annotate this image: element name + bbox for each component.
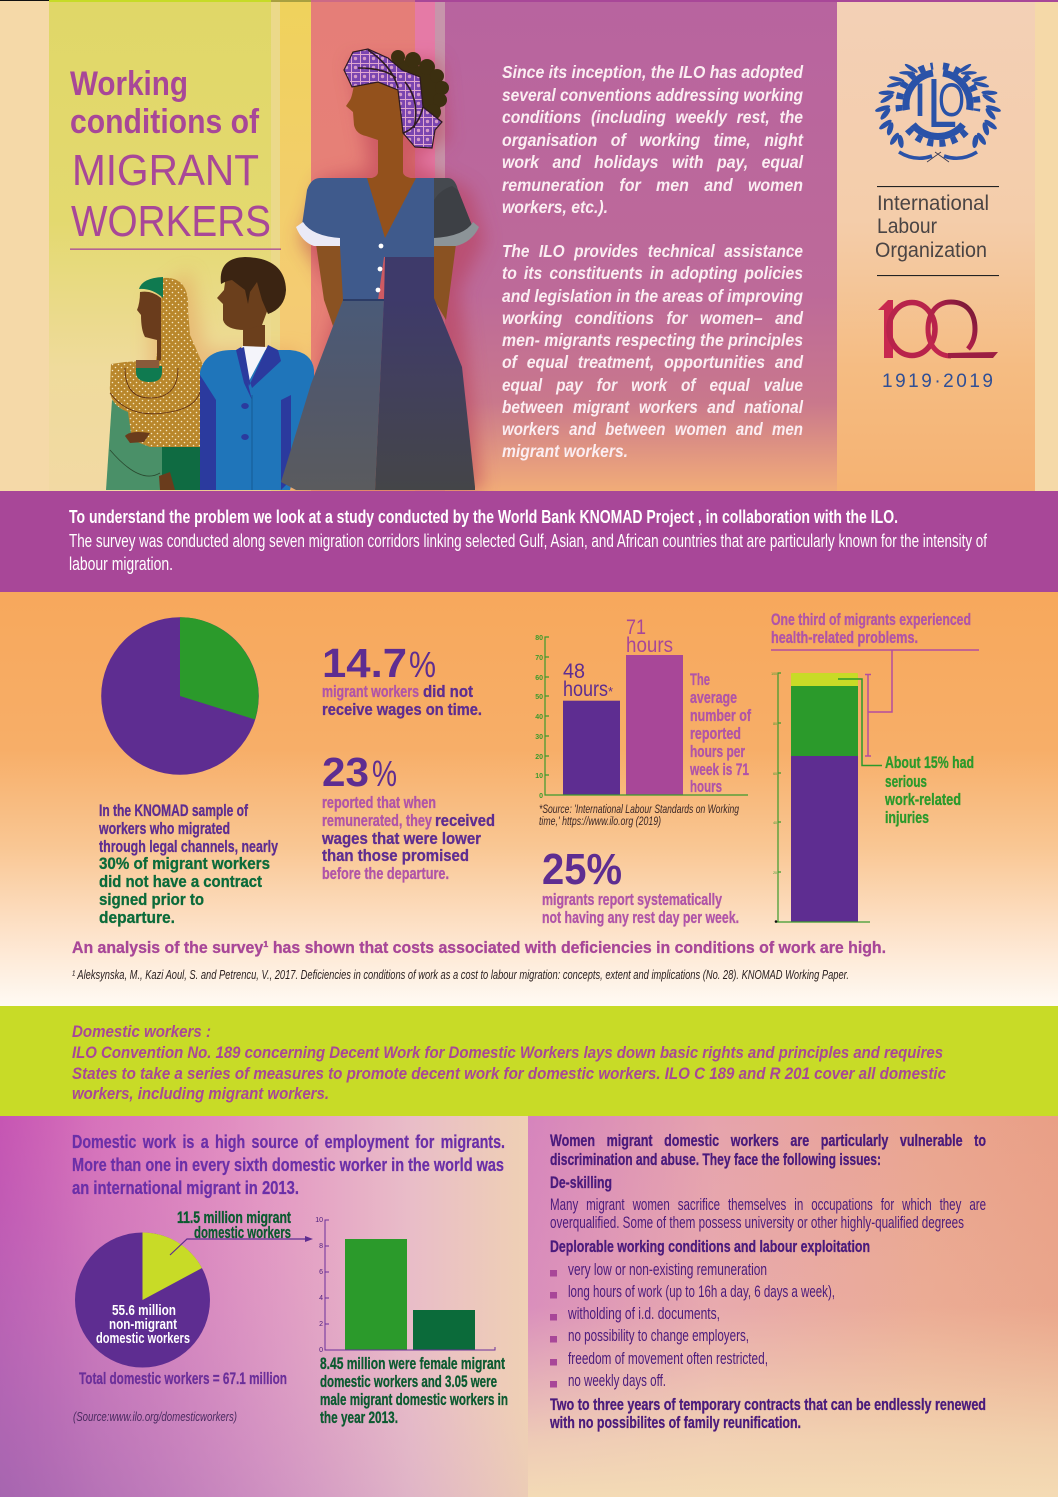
text: female and male migrant domestic workers: male migrant domestic workers in: [320, 1390, 508, 1409]
callout: 11.5 million migrant domestic workers: domestic workers: [194, 1223, 291, 1242]
text: average hours: [689, 670, 751, 796]
intro text: ILO conventions: organisation of working time, night: [502, 130, 804, 150]
stat: 23 percent: than those promised: [322, 846, 469, 865]
stat: 14.7 percent: did not: [423, 682, 473, 701]
callout: one third health problems: One third of migrants experienced: [771, 610, 971, 629]
intro text: ILO conventions: [502, 62, 804, 461]
logo: organization name: International: [877, 192, 989, 215]
logo: organization name: Organization: [875, 239, 987, 262]
panel: domestic workers convention band: workers, including migrant workers.: [72, 1085, 329, 1103]
bar chart: female and male migrant domestic workers: 0: [319, 1347, 323, 1354]
bar chart: weekly hours: 48: [563, 660, 585, 683]
logo: organization name: Labour: [877, 215, 937, 238]
intro text: ILO conventions: The ILO provides technical assistance: [502, 241, 803, 261]
callout: one third health problems: [771, 610, 979, 756]
panel: domestic workers convention band: Domestic workers :: [72, 1023, 211, 1041]
bar chart: weekly hours: hours: [563, 678, 608, 701]
list: labour exploitation issues: [550, 1260, 835, 1390]
bar chart: weekly hours: 70: [535, 655, 543, 662]
pie chart: domestic workers: domestic workers: [96, 1331, 190, 1347]
stat: 23 percent: [321, 749, 495, 883]
list: labour exploitation issues: witholding of i.d. documents,: [567, 1304, 720, 1323]
callout: 11.5 million migrant domestic workers: 11.5 million migrant: [177, 1208, 291, 1227]
shadow: [150, 60, 485, 490]
bar chart: weekly hours: 40: [535, 714, 543, 721]
intro text: ILO conventions: work and holidays with pay, equal: [502, 152, 804, 172]
list: labour exploitation issues: very low or non-existing remuneration: [568, 1260, 767, 1279]
text: KNOMAD sample contracts: 30% of migrant workers: [99, 854, 270, 873]
bar chart: female and male migrant domestic workers: 6: [319, 1269, 323, 1276]
text: female and male migrant domestic workers: 8.45 million were female migrant: [320, 1354, 505, 1373]
text: female and male migrant domestic workers: domestic workers and 3.05 were: [320, 1372, 497, 1391]
bar chart: female and male migrant domestic workers: [315, 1217, 495, 1354]
text: KNOMAD sample contracts: In the KNOMAD sample of: [99, 801, 248, 820]
intro text: ILO conventions: to its constituents in adopting policies: [502, 263, 803, 283]
text: KNOMAD sample contracts: signed prior to: [99, 890, 204, 909]
text: total domestic workers: Total domestic workers = 67.1 million: [79, 1369, 287, 1388]
intro text: ILO conventions: of equal treatment, opportunities and: [502, 352, 803, 372]
callout: serious injuries: [838, 679, 974, 827]
text: women migrant domestic workers issues: [550, 1131, 986, 1256]
list: labour exploitation issues: no possibility to change employers,: [568, 1326, 749, 1345]
panel: study introduction band: labour migration.: [69, 554, 173, 574]
logo: ILO centenary 100: 1919·2019: [882, 371, 993, 392]
pie chart: domestic workers: 55.6 million: [112, 1303, 176, 1319]
callout: serious injuries: injuries: [885, 808, 929, 827]
bar chart: female and male migrant domestic workers: 2: [319, 1321, 323, 1328]
text: female and male migrant domestic workers: the year 2013.: [320, 1408, 398, 1427]
gear: [906, 73, 970, 137]
stat: 23 percent: %: [372, 753, 397, 794]
text: female and male migrant domestic workers: [320, 1354, 508, 1427]
text: KNOMAD sample contracts: did not have a contract: [99, 872, 262, 891]
bar chart: weekly hours: hours: [626, 634, 673, 657]
stat: 25 percent: [542, 845, 739, 927]
bar chart: weekly hours: [535, 616, 748, 800]
logo: organization name: [875, 186, 999, 276]
stat: 25 percent: 25%: [542, 845, 622, 894]
text: average hours: week is 71: [689, 760, 749, 779]
text: average hours: average: [690, 688, 737, 707]
illustration: three migrant workers: [106, 49, 485, 490]
intro text: ILO conventions: conditions (including weekly rest, the: [502, 107, 803, 127]
text: survey analysis statement: An analysis of the survey¹ has shown that costs associated with deficiencies in conditions of work are high.: [72, 938, 886, 957]
text: average hours: reported: [690, 724, 741, 743]
panel: bottom left background: [0, 1116, 528, 1497]
intro text: ILO conventions: migrant workers.: [502, 441, 628, 461]
intro text: ILO conventions: workers and between women and men: [502, 419, 803, 439]
heading: domestic work source of employment: Domestic work is a high source of employment for migrants.: [72, 1132, 505, 1152]
stat: 23 percent: wages that were lower: [321, 829, 481, 848]
stat: 23 percent: before the departure.: [322, 864, 449, 883]
intro text: ILO conventions: several conventions addressing working: [502, 85, 803, 105]
source note: working time: *Source: 'International Labour Standards on Working: [539, 802, 739, 816]
bar chart: weekly hours: *: [608, 684, 613, 699]
logo: ILO centenary 100: [878, 300, 998, 392]
stacked bar chart: health problems: 80: [773, 722, 777, 726]
intro text: ILO conventions: between migrant workers and national: [502, 397, 804, 417]
intro text: ILO conventions: working conditions for women– and: [502, 308, 803, 328]
callout: serious injuries: serious: [885, 772, 927, 791]
panel: domestic workers convention band: States to take a series of measures to promote decent work for domestic workers. ILO C 189 and R 201 cover all domestic: [72, 1065, 946, 1083]
logo: ILO emblem: L: [927, 64, 957, 142]
stat: 23 percent: reported that when: [322, 793, 436, 812]
bar chart: weekly hours: 30: [535, 734, 543, 741]
stacked bar chart: health problems: 20: [773, 871, 777, 875]
title: [70, 65, 281, 250]
title: conditions of: [70, 103, 260, 141]
logo: ILO emblem: I: [913, 73, 927, 126]
stat: 25 percent: not having any rest day per week.: [542, 908, 739, 927]
bar chart: weekly hours: 80: [535, 635, 543, 642]
list: labour exploitation issues: no weekly days off.: [568, 1371, 666, 1390]
stat: 14.7 percent: %: [409, 644, 436, 685]
bar chart: female and male migrant domestic workers: 10: [315, 1217, 323, 1224]
text: KNOMAD sample contracts: departure.: [99, 908, 175, 927]
panel: domestic workers convention band: [0, 1006, 1058, 1116]
stat: 14.7 percent: migrant workers: [322, 682, 419, 701]
text: average hours: The: [690, 670, 710, 689]
stacked bar chart: health problems: 40: [773, 821, 777, 825]
text: women migrant domestic workers issues: De-skilling: [550, 1173, 612, 1192]
bar chart: weekly hours: 0: [539, 793, 543, 800]
stat: 25 percent: migrants report systematically: [542, 890, 722, 909]
stat: 14.7 percent: 14.7: [322, 640, 407, 686]
stacked bar chart: health problems: 100: [771, 672, 777, 676]
bar chart: weekly hours: 10: [535, 773, 543, 780]
source note: working time: time,' https://www.ilo.org (2019): [539, 814, 661, 828]
heading: domestic work source of employment: More than one in every sixth domestic worker in the world was: [72, 1155, 504, 1175]
intro text: ILO conventions: men- migrants respecting the principles: [502, 330, 803, 350]
text: KNOMAD sample contracts: workers who migrated: [98, 819, 230, 838]
text: KNOMAD sample contracts: through legal channels, nearly: [99, 837, 278, 856]
text: women migrant domestic workers issues: Deplorable working conditions and labour exploitation: [550, 1237, 870, 1256]
figure: tall woman in dress: [281, 49, 479, 490]
bar chart: female and male migrant domestic workers: 4: [319, 1295, 323, 1302]
logo: ILO emblem: [874, 60, 1002, 162]
intro text: ILO conventions: and legislation in the areas of improving: [502, 286, 803, 306]
text: average hours: hours per: [690, 742, 745, 761]
callout: one third health problems: health-related problems.: [771, 628, 918, 647]
logo: ILO emblem: O: [938, 73, 965, 126]
stacked bar chart: health problems: [771, 672, 870, 923]
intro text: ILO conventions: workers, etc.).: [502, 197, 608, 217]
intro text: ILO conventions: Since its inception, the ILO has adopted: [502, 62, 803, 82]
text: temporary contracts: with no possibilites of family reunification.: [549, 1413, 801, 1432]
callout: 11.5 million migrant domestic workers: [170, 1208, 313, 1255]
panel: study introduction band: [0, 491, 1058, 592]
stat: 14.7 percent: [322, 640, 482, 719]
stat: 23 percent: remunerated, they: [322, 811, 432, 830]
intro text: ILO conventions: equal pay for work of equal value: [502, 375, 803, 395]
wreath: [874, 60, 1002, 153]
panel: bottom right background: [528, 1116, 1058, 1497]
title: MIGRANT: [72, 146, 259, 195]
source note: domestic workers: (Source:www.ilo.org/domesticworkers): [73, 1410, 237, 1424]
bar chart: weekly hours: 71: [626, 616, 646, 639]
bar chart: weekly hours: 20: [535, 754, 543, 761]
title: WORKERS: [71, 197, 271, 246]
title: Working: [70, 65, 188, 103]
figure: man in blue jacket: [200, 257, 314, 490]
callout: serious injuries: work-related: [884, 790, 961, 809]
stat: 23 percent: 23: [322, 749, 369, 795]
stat: 14.7 percent: receive wages on time.: [322, 700, 482, 719]
text: temporary contracts: [549, 1395, 986, 1432]
panel: survey findings background: [0, 592, 1058, 1006]
pie chart: contract share: [101, 617, 259, 775]
text: average hours: hours: [690, 777, 722, 796]
stat: 23 percent: received: [435, 811, 495, 830]
stacked bar chart: health problems: 60: [773, 772, 777, 776]
text: women migrant domestic workers issues: discrimination and abuse. They face the following issues:: [550, 1150, 881, 1169]
bar chart: weekly hours: 60: [535, 675, 543, 682]
text: KNOMAD sample contracts: [98, 801, 278, 927]
heading: domestic work source of employment: [72, 1132, 505, 1198]
callout: serious injuries: About 15% had: [885, 753, 974, 772]
bar chart: female and male migrant domestic workers: 8: [319, 1243, 323, 1250]
text: average hours: number of: [690, 706, 751, 725]
list: labour exploitation issues: freedom of movement often restricted,: [568, 1349, 768, 1368]
source note: working time: [539, 802, 739, 828]
panel: domestic workers convention band: ILO Convention No. 189 concerning Decent Work for Domestic Workers lays down basic rights and principles and requires: [72, 1044, 943, 1062]
pie chart: domestic workers: non-migrant: [109, 1317, 177, 1333]
pie chart: domestic workers: [75, 1232, 210, 1368]
panel: header background stripes: [0, 0, 1058, 491]
bar chart: weekly hours: 50: [535, 694, 543, 701]
intro text: ILO conventions: remuneration for men and women: [502, 175, 803, 195]
figure: woman with headscarf: [106, 277, 203, 490]
list: labour exploitation issues: long hours of work (up to 16h a day, 6 days a week),: [568, 1282, 835, 1301]
heading: domestic work source of employment: an international migrant in 2013.: [72, 1178, 299, 1198]
